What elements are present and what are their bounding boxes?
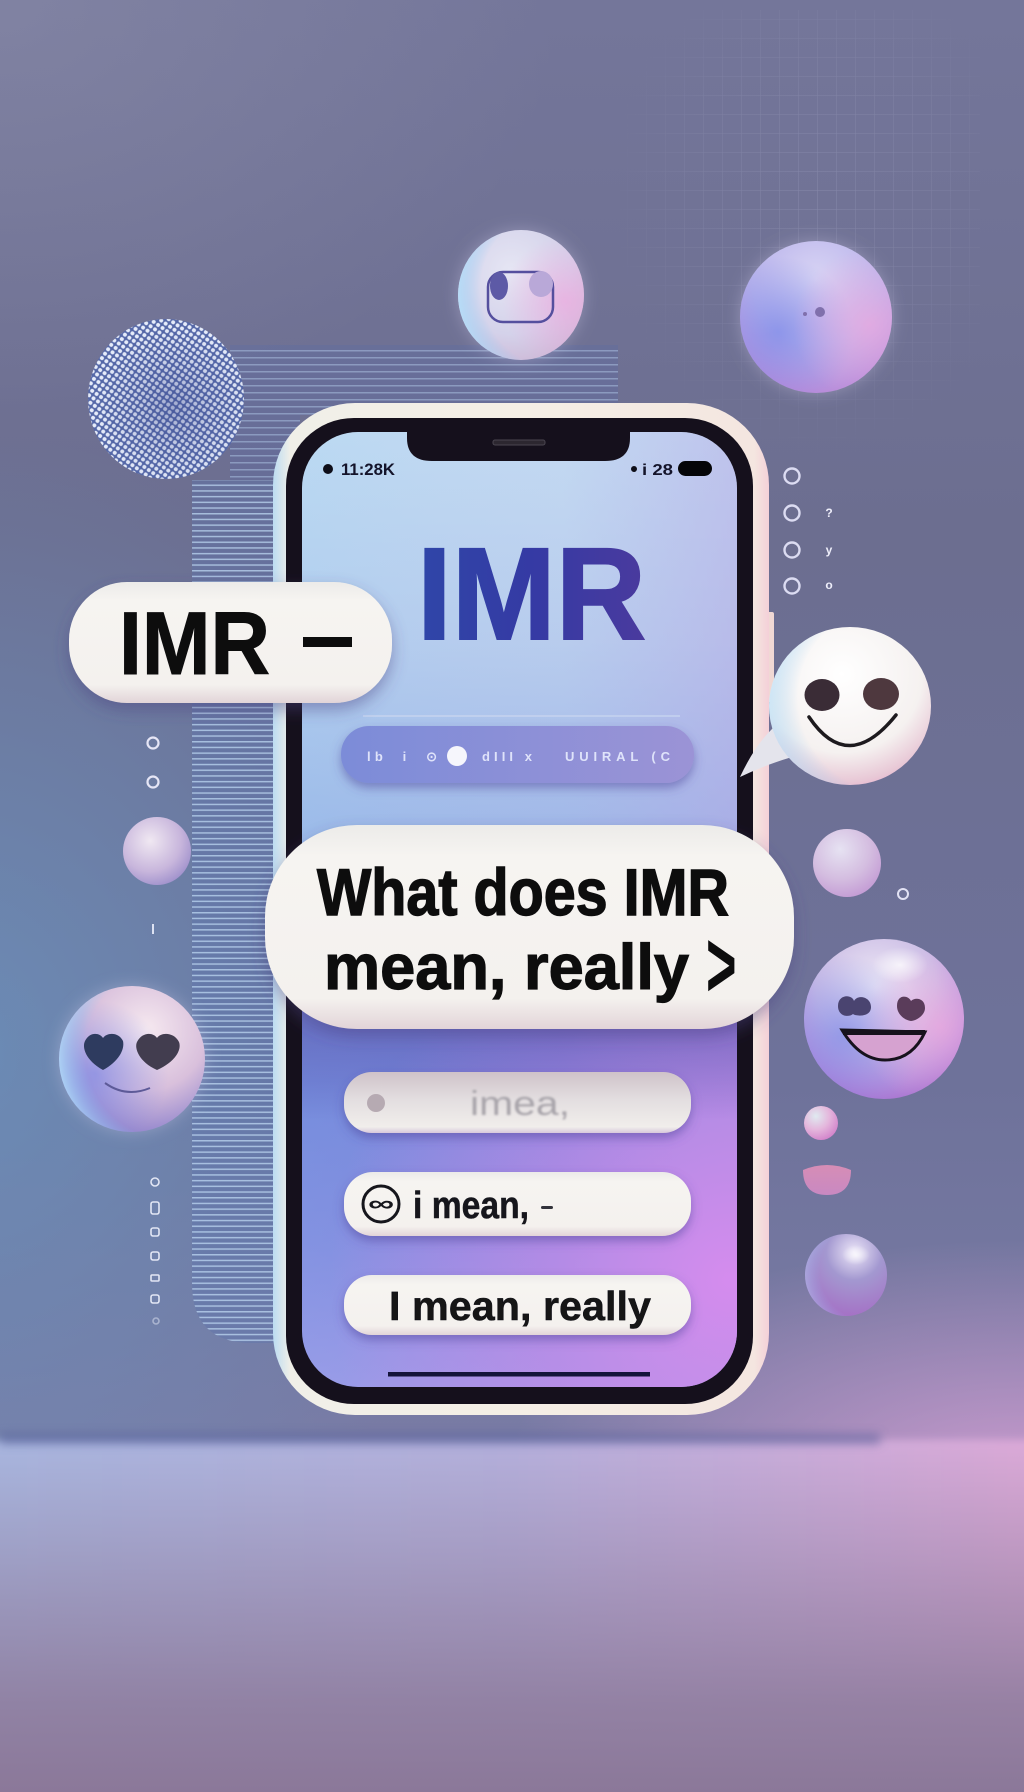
emoji head	[804, 939, 964, 1099]
bubble: main question: mean, really	[324, 931, 689, 1003]
half circle: pink	[803, 1165, 851, 1195]
heart emoji smile	[105, 1083, 150, 1092]
heart emoji head	[59, 986, 205, 1132]
phone	[273, 403, 774, 1415]
icon column: right glyphs: o	[825, 578, 833, 592]
bubble: main question	[265, 825, 794, 1029]
icon column: right glyphs	[825, 506, 833, 592]
button 3: I mean, really	[389, 1283, 651, 1329]
slider pill	[341, 726, 694, 783]
phone screen	[302, 432, 737, 1387]
home indicator	[388, 1372, 650, 1376]
button 1: imea,	[470, 1085, 570, 1123]
ring dots: left	[148, 738, 158, 788]
smiley head	[769, 627, 931, 785]
halftone sphere	[88, 319, 244, 479]
phone notch	[407, 432, 630, 461]
button 3	[344, 1275, 691, 1335]
slider pill: dIII x	[482, 749, 533, 764]
status bar right	[631, 461, 712, 479]
floor	[0, 1434, 1024, 1792]
button 2: ∞	[368, 1191, 394, 1216]
heart right	[136, 1034, 180, 1070]
icon column: right rings	[784, 468, 800, 594]
bubble: IMR dash: IMR	[119, 593, 270, 693]
emoji mouth	[842, 1030, 925, 1060]
status bar left: 11:28K	[341, 460, 396, 479]
icon column: lower left	[151, 1178, 159, 1324]
slider pill: lb i ⊙	[367, 749, 437, 764]
emoji: smiling speech bubble	[740, 627, 931, 785]
slider pill: UUIRAL (C	[565, 749, 671, 764]
emoji eyes	[838, 996, 925, 1021]
phone side button	[766, 612, 774, 702]
button 1	[344, 1072, 691, 1133]
button 2	[344, 1172, 691, 1236]
title: IMR: IMR	[417, 520, 646, 667]
sphere: left small	[123, 817, 191, 885]
sphere: top centre face	[458, 230, 584, 360]
icon column: right glyphs: y	[826, 543, 833, 557]
notch speaker	[493, 440, 545, 445]
sphere: right small	[813, 829, 881, 897]
status bar right: i 28	[642, 462, 673, 479]
wavy lines panel: top strip	[230, 345, 618, 480]
sphere: small pink	[804, 1106, 838, 1140]
bubble: main question: What does IMR	[317, 855, 729, 929]
phone bezel	[286, 418, 753, 1404]
sphere: top right	[740, 241, 892, 393]
emoji: laughing purple	[804, 939, 964, 1099]
smiley eyes	[804, 678, 899, 711]
phone frame	[273, 403, 769, 1415]
lines panel: left column	[192, 480, 280, 1343]
sphere: lower right	[805, 1234, 887, 1316]
divider above slider	[363, 715, 680, 717]
icon column: right glyphs: ?	[825, 506, 833, 520]
button 2: i mean,	[413, 1185, 529, 1227]
smiley mouth	[809, 715, 896, 746]
heart left	[84, 1034, 123, 1070]
bubble: IMR dash	[69, 582, 392, 703]
ring: right small	[898, 889, 908, 899]
speech tail	[740, 728, 792, 777]
bubble: main question: >	[706, 913, 737, 1018]
decorative grid panel	[666, 12, 970, 380]
tick: left	[152, 924, 154, 934]
emoji: heart eyes	[59, 986, 205, 1132]
